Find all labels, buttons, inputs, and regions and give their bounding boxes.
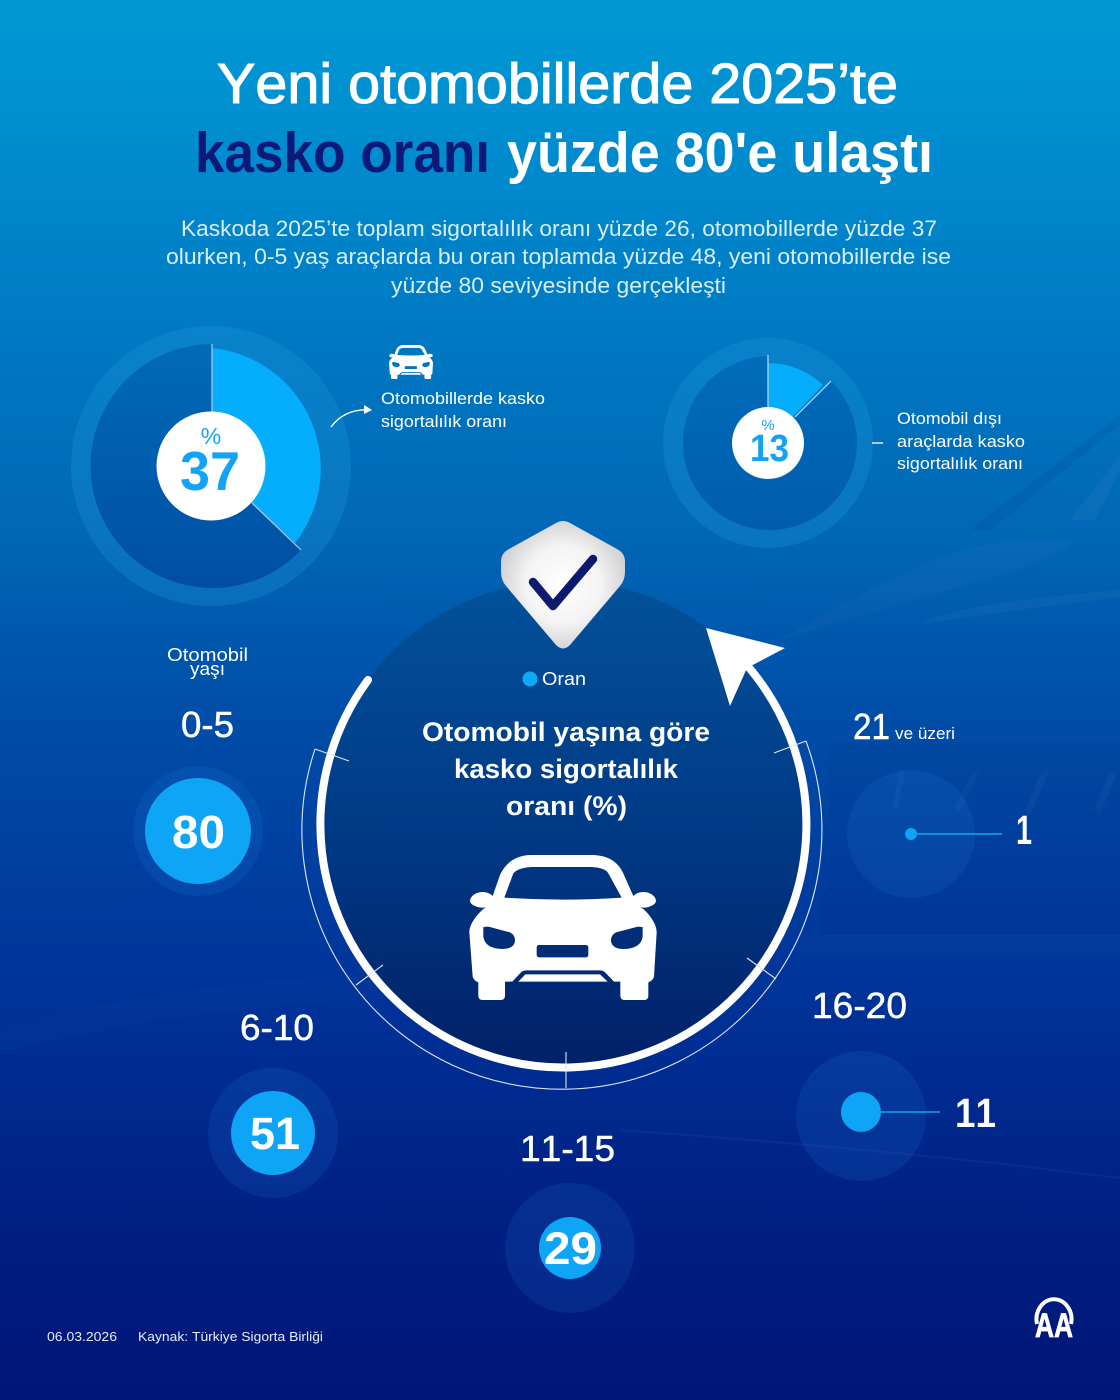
axis title: car age: yaşı xyxy=(190,659,225,679)
bubble: age 6-10 xyxy=(208,1007,338,1198)
title xyxy=(195,52,933,185)
footer: date and source: Kaynak: Türkiye Sigorta Birliği xyxy=(138,1329,323,1344)
bubble: age 0-5: 0-5 xyxy=(181,704,234,745)
footer: date and source: 06.03.2026 xyxy=(47,1329,117,1344)
intro text xyxy=(166,216,951,298)
axis title: car age: Otomobil xyxy=(167,645,248,665)
bubble: age 21 and above xyxy=(847,706,1032,898)
bubble: age 11-15: 11-15 xyxy=(520,1128,615,1169)
intro text: Kaskoda 2025’te toplam sigortalılık oranı yüzde 26, otomobillerde yüzde 37 xyxy=(181,216,937,241)
dial heading xyxy=(422,717,710,821)
bubble: age 11-15: 29 xyxy=(544,1223,597,1274)
panel: central dial xyxy=(302,581,822,1089)
chart: cars 37 percent: 37 xyxy=(180,440,240,502)
chart: non-cars 13 percent: % xyxy=(761,417,775,434)
bubble: age 11-15 xyxy=(505,1128,635,1313)
chart: cars 37 percent: % xyxy=(201,423,221,449)
chart: non-cars 13 percent: 13 xyxy=(750,428,789,470)
bubble: age 21 and above: 1 xyxy=(1016,807,1032,853)
intro text: olurken, 0-5 yaş araçlarda bu oran toplamda yüzde 48, yeni otomobillerde ise xyxy=(166,244,951,269)
bubble: age 0-5 xyxy=(133,704,263,896)
bubble: age 6-10: 51 xyxy=(250,1108,300,1159)
bubble: age 6-10: 6-10 xyxy=(240,1007,314,1048)
label: non-cars: Otomobil dışı xyxy=(897,409,1002,428)
axis title: car age xyxy=(167,645,248,679)
legend: rate xyxy=(522,669,586,689)
label: cars: Otomobillerde kasko xyxy=(381,389,545,408)
legend: rate: Oran xyxy=(542,669,586,689)
bubble: age 16-20: 11 xyxy=(955,1090,996,1136)
label: non-cars xyxy=(872,409,1025,473)
intro text: yüzde 80 seviyesinde gerçekleşti xyxy=(391,273,726,298)
logo: AA: AA xyxy=(1035,1307,1073,1345)
label: non-cars: sigortalılık oranı xyxy=(897,454,1023,473)
chart: non-cars 13 percent xyxy=(663,338,873,548)
title: yüzde 80'e ulaştı xyxy=(507,121,933,185)
label: cars xyxy=(381,389,545,431)
background car silhouette xyxy=(0,415,1120,1178)
bubble: age 0-5: 80 xyxy=(172,806,225,858)
label: cars: sigortalılık oranı xyxy=(381,412,507,431)
title: kasko oranı xyxy=(195,121,490,185)
dial heading: Otomobil yaşına göre xyxy=(422,717,710,747)
arrow: to cars label xyxy=(331,405,372,427)
logo: AA xyxy=(1035,1299,1073,1345)
bubble: age 16-20: 16-20 xyxy=(812,985,907,1026)
bubble: age 16-20 xyxy=(796,985,996,1181)
dial heading: oranı (%) xyxy=(506,791,627,821)
icon: small car xyxy=(389,345,433,379)
icon: shield with check xyxy=(501,521,625,648)
label: non-cars: araçlarda kasko xyxy=(897,432,1025,451)
footer: date and source xyxy=(47,1329,323,1344)
bubble: age 21 and above: ve üzeri xyxy=(895,724,955,743)
chart: cars 37 percent xyxy=(71,326,351,606)
title: Yeni otomobillerde 2025’te xyxy=(217,52,898,116)
dial heading: kasko sigortalılık xyxy=(454,754,679,784)
icon: large car xyxy=(469,855,657,1000)
bubble: age 21 and above: 21 xyxy=(853,706,890,747)
